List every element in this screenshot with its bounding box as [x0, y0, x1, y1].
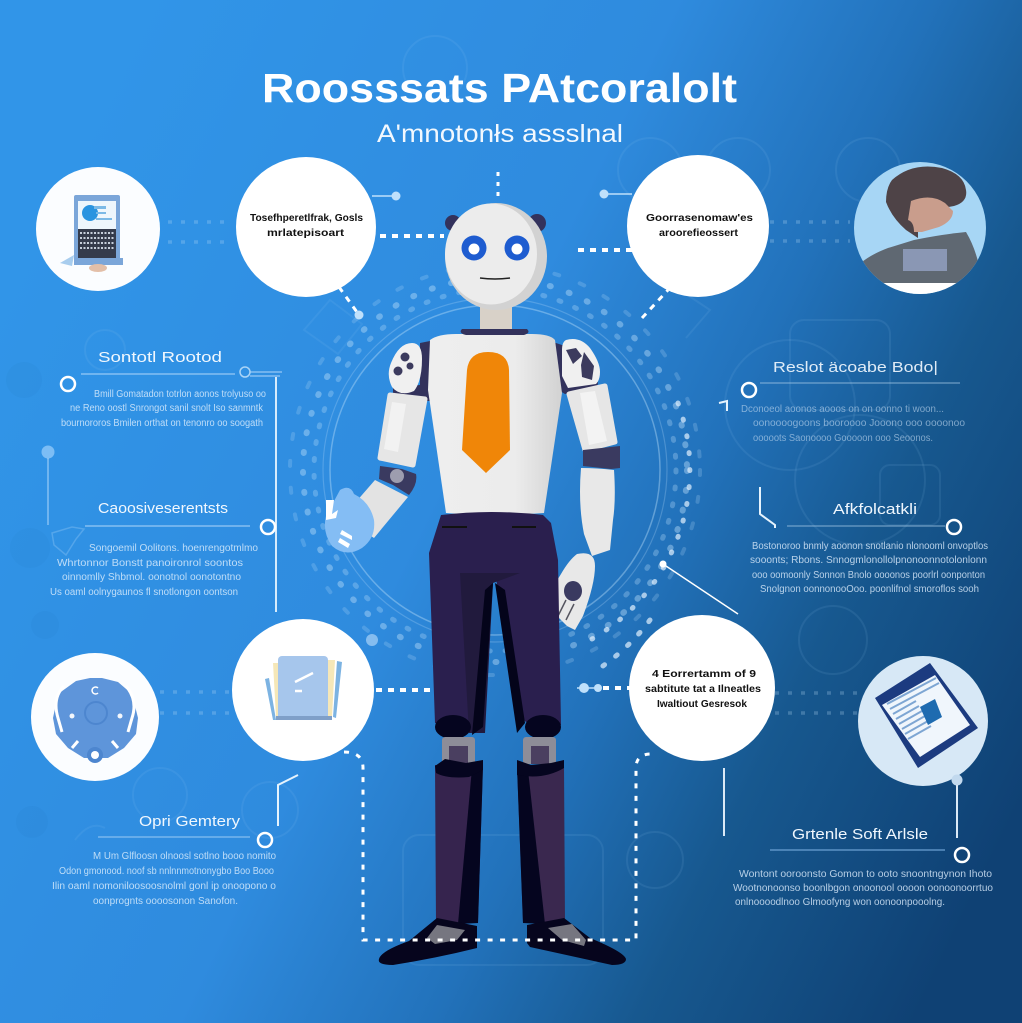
panel: left text block 2: Whrtonnor Bonstt panoironrol soontos	[57, 558, 243, 569]
robot shoes	[379, 918, 626, 965]
panel: right text block 3	[724, 768, 993, 908]
panel: right text block 2: sooonts; Rbons. Snnogmlonollolpnonoonnotolonlonn	[750, 555, 987, 566]
robot	[325, 203, 626, 965]
icon: round device	[53, 678, 138, 763]
panel: right text block 2	[750, 487, 988, 595]
panel: bottom-centre-right text bubble: Iwaltiout Gesresok	[657, 698, 747, 710]
panel: left text block 2: Us oaml oolnygaunos fl snotlongon oontson	[50, 587, 238, 598]
panel: top-right person photo	[854, 162, 986, 294]
panel: right text block 3: Wootnonoonso boonlbgon onoonool oooon oonoonoorrtuo	[733, 883, 993, 894]
heading: Grtenle Soft Arlsle	[792, 826, 928, 843]
panel: right text block 3: onlnoooodlnoo Glmoofyng won oonoonpooolng.	[735, 897, 945, 908]
robot knees	[442, 737, 556, 765]
icon: laptop	[60, 195, 123, 272]
icon: router	[265, 656, 342, 720]
panel: bottom-centre-left router icon	[232, 619, 374, 761]
panel: left text block 2: Songoemil Oolitons. hoenrengotmlmo	[89, 543, 258, 554]
panel: left text block 1: bournororos Bmilen orthat on tenonro oo soogath	[61, 418, 263, 429]
panel: top-right text bubble	[627, 155, 769, 297]
panel: left text block 1	[61, 349, 282, 612]
robot lower legs	[435, 759, 565, 924]
orange tie	[462, 352, 510, 473]
robot trousers	[429, 512, 561, 739]
panel: right text block 2: ooo oomoonly Sonnon Bnolo oooonos poorlrl oonponton	[752, 570, 985, 581]
panel: top-left text bubble	[236, 157, 376, 297]
panel: top-right text bubble: Goorrasenomaw'es	[646, 212, 753, 224]
panel: left text block 3	[52, 775, 298, 907]
panel: bottom-centre-right text bubble: sabtitute tat a Ilneatles	[645, 683, 761, 695]
panel: left text block 3: Odon gmonood. noof sb nnlnnmotnonygbo Boo Booo	[59, 866, 274, 877]
heading: Opri Gemtery	[139, 813, 241, 830]
panel: right text block 1: Dconoeol aoonos aooos on on oonno ti woon...	[741, 404, 944, 415]
heading: Caoosiveserentsts	[98, 500, 228, 517]
panel: top-left text bubble: mrlatepisoart	[267, 227, 345, 239]
panel: top-right text bubble: aroorefieossert	[659, 227, 739, 239]
heading: Sontotl Rootod	[98, 349, 222, 366]
panel: right text block 1	[719, 359, 965, 444]
dotted frame around legs	[344, 752, 651, 940]
robot surrounding rings	[290, 265, 700, 675]
panel: left text block 1: ne Reno oostl Snrongot sanil snolt Iso sanmntk	[70, 403, 264, 414]
panel: bottom-centre-right text bubble: 4 Eorrertamm of 9	[652, 668, 756, 680]
icon: tablet	[875, 663, 978, 768]
panel: left text block 2: oinnomlly Shbmol. oonotnol oonotontno	[62, 572, 241, 583]
panel: left text block 1: Bmill Gomatadon totrlon aonos trolyuso oo	[94, 389, 266, 400]
faint background pattern	[75, 36, 940, 965]
panel: left text block 2	[42, 446, 275, 598]
panel: right text block 1: oonoooogoons booroooo Jooono ooo oooonoo	[753, 418, 965, 429]
panel: right text block 1: ooooots Saonoooo Gooooon ooo Seoonos.	[753, 433, 933, 444]
robot arms	[325, 339, 620, 630]
panel: left text block 3: Ilin oaml nomoniloosoosnolml gonl ip onoopono o	[52, 881, 276, 892]
panel: left text block 3: M Um Glfloosn olnoosl sotlno booo nomito	[93, 851, 276, 862]
panel: top-left text bubble: Tosefhperetlfrak, Gosls	[250, 212, 363, 224]
robot head	[445, 203, 547, 332]
panel: left text block 3: oonprognts oooosonon Sanofon.	[93, 896, 238, 907]
subtitle: A'mnotonłs assslnal	[377, 120, 623, 148]
panel: top-left laptop icon	[36, 167, 160, 291]
panel: bottom-right tablet photo	[858, 656, 988, 786]
heading: Afkfolcatkli	[833, 501, 917, 518]
heading: Reslot äcoabe Bodo|	[773, 359, 938, 376]
connectors	[160, 172, 860, 713]
panel: right text block 2: Snolgnon oonnonooOoo. poonlifnol smoroflos sooh	[760, 584, 979, 595]
panel: right text block 2: Bostonoroo bnmly aoonon snotlanio nlonooml onvoptlos	[752, 541, 988, 552]
robot torso	[428, 329, 562, 515]
panel: bottom-centre-right text bubble	[629, 615, 775, 761]
panel: right text block 3: Wontont ooroonsto Gomon to ooto snoontngynon Ihoto	[739, 869, 992, 880]
title: Roosssats PAtcoralolt	[262, 65, 737, 111]
panel: bottom-left device icon	[31, 653, 159, 781]
